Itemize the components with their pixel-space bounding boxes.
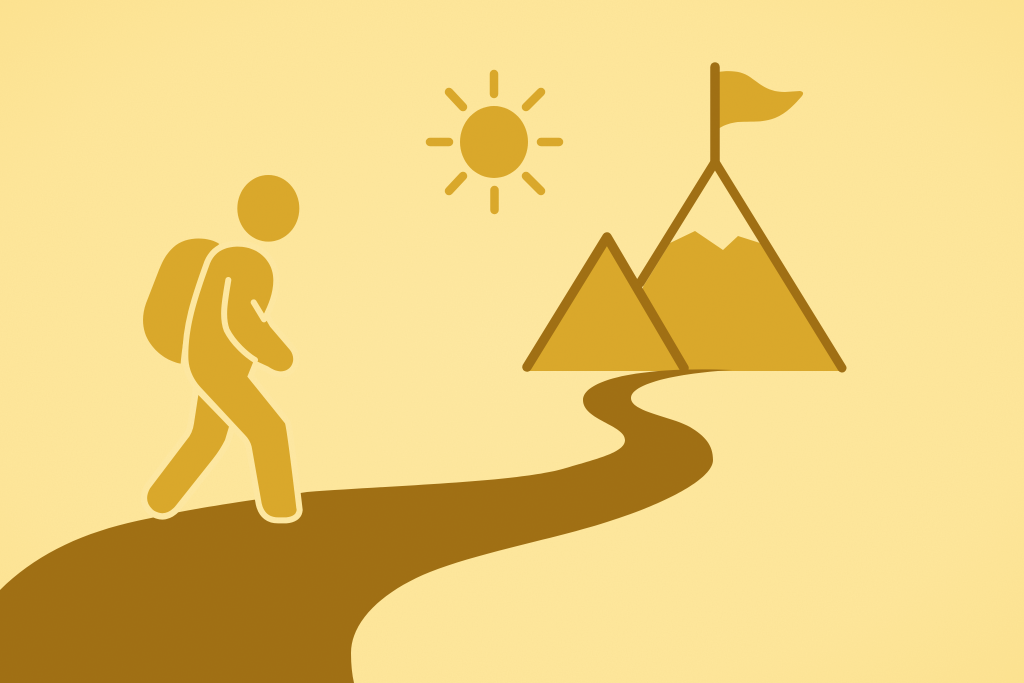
sun disc [460,106,528,178]
sun rays [430,74,559,210]
small peak outline [527,237,684,368]
arm groove [224,280,255,360]
backpack [143,239,219,364]
torso, arm and front leg [188,247,297,517]
icon: hiker [143,175,299,517]
small peak fill [527,237,685,371]
winding path [0,369,732,683]
icon: mountains with summit flag [527,67,842,371]
large peak fill [640,231,840,371]
flag [718,71,803,129]
icon: sun [430,74,559,210]
hiker head [237,175,299,242]
flagpole [710,67,720,162]
arm notch [254,302,264,319]
large peak outline [640,162,842,368]
back leg [147,395,229,513]
